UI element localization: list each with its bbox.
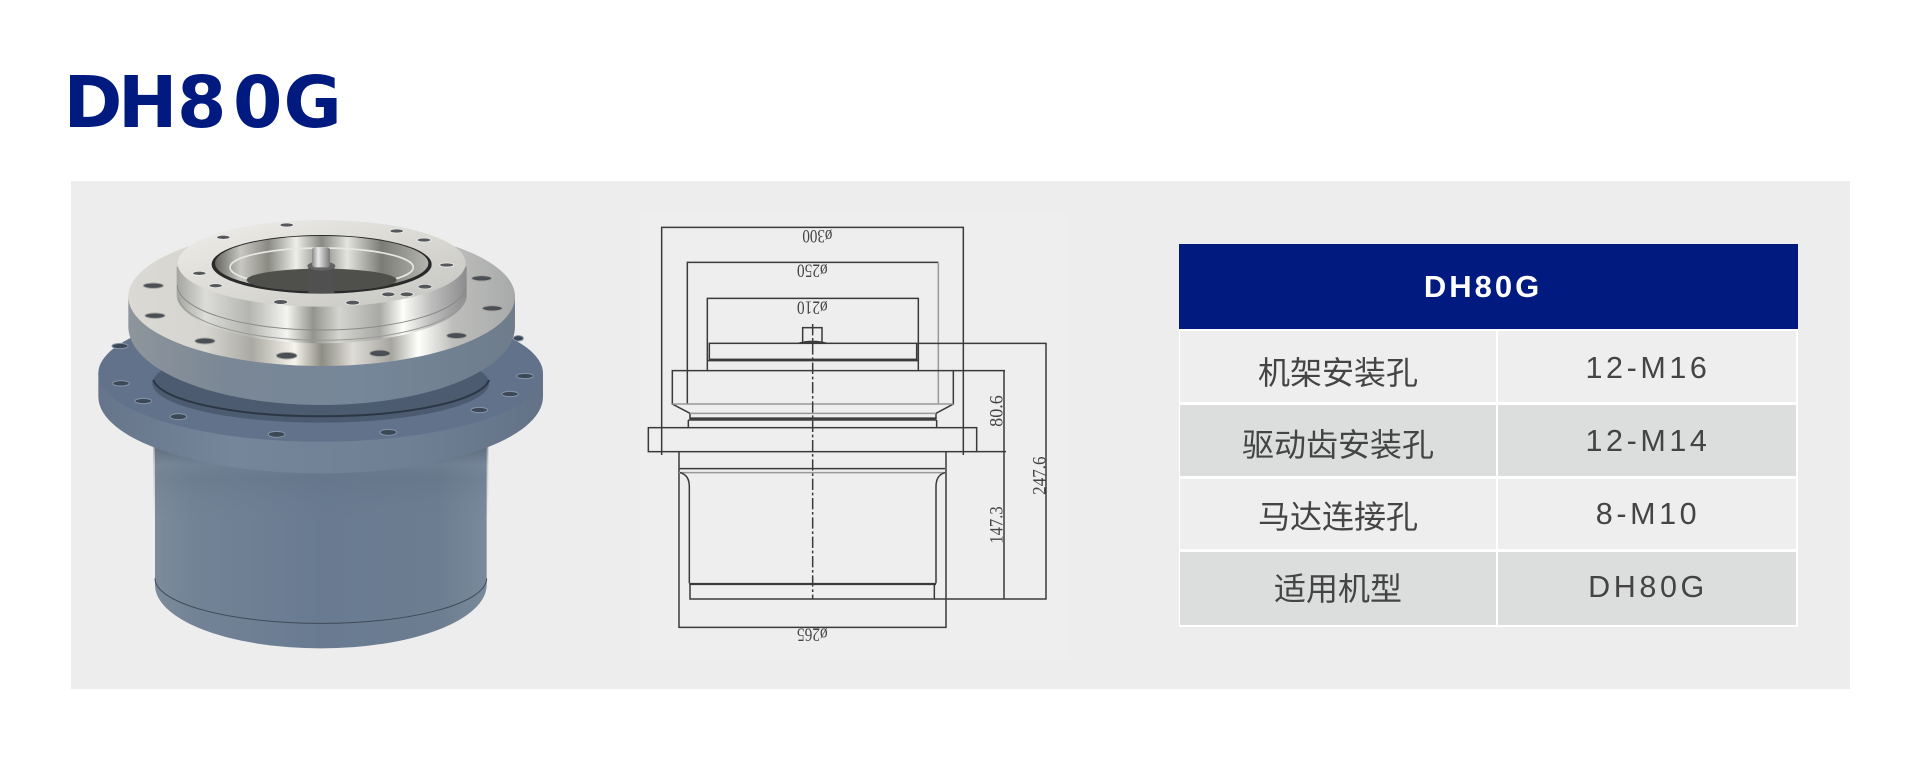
row: applicable model (1180, 552, 1796, 625)
top face bolt holes (193, 223, 454, 305)
drawing backdrop (640, 210, 1070, 660)
row: frame mounting holes (1180, 331, 1796, 402)
title: DH80G (64, 61, 342, 144)
row: motor connection holes: 马达连接孔 (1258, 499, 1418, 535)
dimension labels: ø300 (802, 225, 832, 246)
table backing (1179, 244, 1798, 627)
table header (1179, 244, 1798, 329)
dimension labels: 80.6 (987, 395, 1008, 427)
upper flange (128, 227, 515, 405)
row: applicable model: DH80G (1588, 570, 1708, 604)
spec table (1179, 244, 1798, 627)
chrome ring (177, 220, 467, 343)
dimension labels: ø210 (797, 296, 828, 317)
row: drive sprocket mounting holes: 驱动齿安装孔 (1242, 427, 1434, 463)
row: motor connection holes: 8-M10 (1596, 497, 1700, 531)
row: frame mounting holes: 12-M16 (1585, 351, 1711, 385)
lower flange (98, 305, 543, 473)
upper flange bolt holes (143, 276, 502, 359)
lower flange bolt holes (112, 336, 533, 437)
row: drive sprocket mounting holes: 12-M14 (1585, 424, 1711, 458)
product photo: travel gearbox (98, 220, 543, 648)
row: frame mounting holes: 机架安装孔 (1258, 355, 1418, 391)
shaft (307, 247, 335, 293)
outlines (648, 227, 1047, 627)
dimension labels: ø250 (797, 260, 828, 281)
dimension labels: 247.6 (1029, 456, 1050, 495)
panel: product background (71, 181, 1850, 689)
dimension labels: ø265 (797, 624, 828, 645)
dimension labels: 147.3 (987, 506, 1008, 544)
table header: DH80G (1424, 269, 1542, 304)
dimension labels (797, 225, 1050, 645)
technical drawing (640, 210, 1070, 660)
bore (212, 235, 432, 294)
row: drive sprocket mounting holes (1180, 405, 1796, 476)
cylinder body (153, 447, 488, 648)
row: applicable model: 适用机型 (1274, 571, 1402, 607)
row: motor connection holes (1180, 479, 1796, 549)
